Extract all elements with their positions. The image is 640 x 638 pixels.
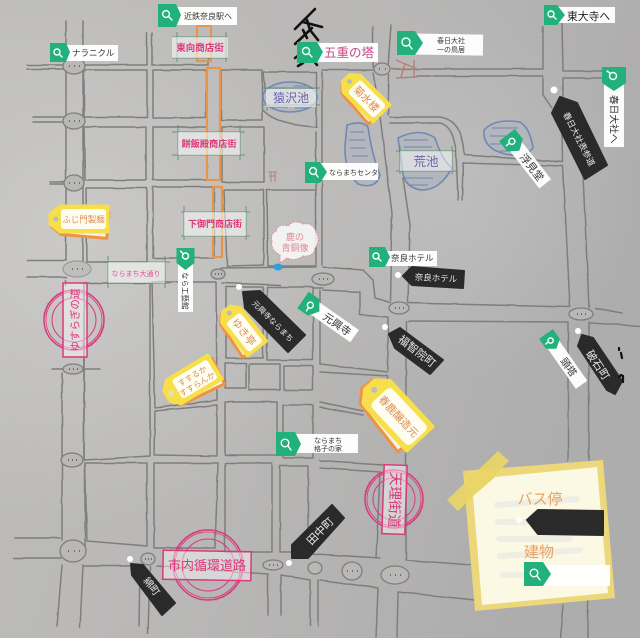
brush-drawn five-storey pagoda [295, 9, 322, 66]
tag: ゆき亭: ゆき亭 [229, 316, 259, 349]
orange shopping-street outlines [197, 26, 222, 257]
label: 浮見堂 (rotated): 浮見堂 [517, 152, 546, 184]
label: 奈良ホテル: 奈良ホテル [391, 253, 434, 263]
label: ならまち 格子の家: ならまち [314, 437, 342, 445]
label: 春日大社へ (vertical): 春日大社へ [608, 95, 620, 144]
brush marks at right edge [619, 348, 623, 382]
legend: バス停: バス停 [517, 491, 563, 508]
heading: 餅飯殿商店街 [172, 125, 245, 160]
heading: ならまち大通り: ならまち大通り [112, 269, 160, 278]
label: 元興寺 (rotated): 元興寺 [320, 310, 354, 339]
stamp: 市内循環道路: checked checked [172, 529, 200, 558]
small torii [268, 172, 277, 182]
heading: 餅飯殿商店街: 餅飯殿商店街 [181, 138, 237, 149]
stamp: 天理街道 [364, 464, 424, 536]
pond: 猿沢池 [263, 82, 317, 112]
tag: ふじ門製麺 [50, 206, 109, 238]
label: なら工藝館 (vertical) [176, 248, 194, 312]
bus stop: 破石町 [575, 328, 622, 394]
label: 頭塔 (rotated): 頭塔 [557, 355, 580, 379]
bus stop: 元興寺ならまち [236, 284, 305, 352]
label: ならまちセンタ [305, 162, 378, 183]
bus stop: 綿町 [127, 556, 175, 615]
heading: 下御門商店街 [181, 206, 250, 240]
bus stop: 福智院町: 福智院町 [395, 332, 439, 370]
tag: 春鹿醸造元 [349, 370, 433, 456]
pond: east of ならまちセンタ [345, 123, 380, 186]
heading: 猿沢池: 猿沢池 [273, 90, 309, 105]
stamp: 天理街道: 天理街道 [386, 472, 404, 528]
tag: すするか すすらんか [160, 354, 227, 412]
label: 近鉄奈良駅へ: 近鉄奈良駅へ [184, 11, 232, 21]
tag: 菊水楼 [334, 70, 390, 125]
stamp: 天理街道: checked checked [394, 503, 424, 530]
heading: 荒池 [396, 146, 456, 174]
label: 五重の塔 [297, 42, 378, 63]
label: 元興寺 (rotated) [297, 292, 360, 344]
label: なら工藝館 (vertical): なら工藝館 [180, 272, 190, 310]
torii near 春日大社 [396, 60, 417, 78]
tag: 春鹿醸造元: 春鹿醸造元 [376, 393, 421, 440]
marker: deer statue blue dot [274, 264, 282, 270]
tag: すするか すすらんか: すするか [176, 364, 209, 389]
label: 春日大社 一の鳥居 [397, 31, 483, 56]
heading: 下御門商店街: 下御門商店街 [188, 218, 242, 229]
stamp: 市内循環道路 [162, 529, 252, 601]
legend sticky note [447, 451, 615, 611]
label: 頭塔 (rotated) [539, 329, 589, 390]
label: ならまち 格子の家: 格子の家 [314, 444, 342, 453]
road-junction speech bubbles [60, 58, 593, 584]
stamp: ゆすらぎの道: checked checked [43, 288, 72, 316]
label: ナラニクル: ナラニクル [72, 48, 115, 58]
label: 五重の塔: 五重の塔 [324, 45, 375, 60]
bus stop: 綿町: 綿町 [140, 574, 163, 598]
bus stop: 奈良ホテル [395, 267, 464, 288]
bus stop: 田中町 [286, 505, 344, 566]
label: ナラニクル [50, 43, 118, 62]
label: ならまち 格子の家 [276, 432, 358, 456]
label: 奈良ホテル [369, 247, 437, 267]
label: 東大寺へ [544, 5, 615, 25]
callout: 鹿の青銅像: 青銅像 [281, 242, 309, 253]
label: 春日大社 一の鳥居: 春日大社 [437, 36, 465, 45]
tag: ふじ門製麺: ふじ門製麺 [62, 214, 105, 224]
bus stop: 春日大社表参道 [550, 86, 607, 179]
stamp: 市内循環道路: checked checked [216, 571, 244, 601]
bus stop: 福智院町 [382, 324, 443, 374]
bus stop: 春日大社表参道: 春日大社表参道 [561, 110, 597, 168]
heading: 猿沢池 [262, 88, 320, 107]
heading: ならまち大通り [102, 256, 170, 288]
legend: building label marker [524, 562, 610, 586]
legend: bus stop marker [516, 510, 603, 535]
label: ならまちセンタ: ならまちセンタ [329, 168, 378, 177]
label: 春日大社 一の鳥居: 一の鳥居 [437, 45, 465, 54]
tag: ゆき亭 [213, 302, 266, 359]
label: 春日大社へ (vertical) [602, 67, 626, 147]
bus stop: 奈良ホテル: 奈良ホテル [415, 272, 458, 284]
heading: 東向商店街 [172, 32, 228, 62]
heading: 荒池: 荒池 [413, 155, 439, 169]
label: 東大寺へ: 東大寺へ [567, 9, 610, 23]
bus stop: 破石町: 破石町 [583, 347, 613, 383]
stamp: ゆすらぎの道: ゆすらぎの道 [68, 288, 82, 352]
stamp: 市内循環道路: 市内循環道路 [168, 558, 246, 573]
masking tape [447, 451, 509, 511]
bus stop: 元興寺ならまち: 元興寺ならまち [250, 299, 295, 344]
bus stop: 田中町: 田中町 [304, 515, 336, 548]
callout: 鹿の青銅像 [272, 222, 318, 263]
label: 近鉄奈良駅へ [158, 4, 237, 27]
pond: 荒池 water [398, 132, 452, 190]
tag: 菊水楼: 菊水楼 [350, 83, 382, 115]
legend: 建物: 建物 [524, 544, 554, 561]
stamp: ゆすらぎの道 [43, 282, 105, 358]
tag: すするか すすらんか: すすらんか [178, 370, 217, 399]
pond: 浮見堂 water [484, 121, 533, 155]
heading: 東向商店街: 東向商店街 [176, 42, 224, 54]
label: 浮見堂 (rotated) [499, 129, 553, 190]
callout: 鹿の青銅像: 鹿の [286, 231, 304, 242]
stamp: 天理街道: checked checked [364, 468, 394, 495]
stamp: ゆすらぎの道: checked checked [76, 324, 105, 352]
